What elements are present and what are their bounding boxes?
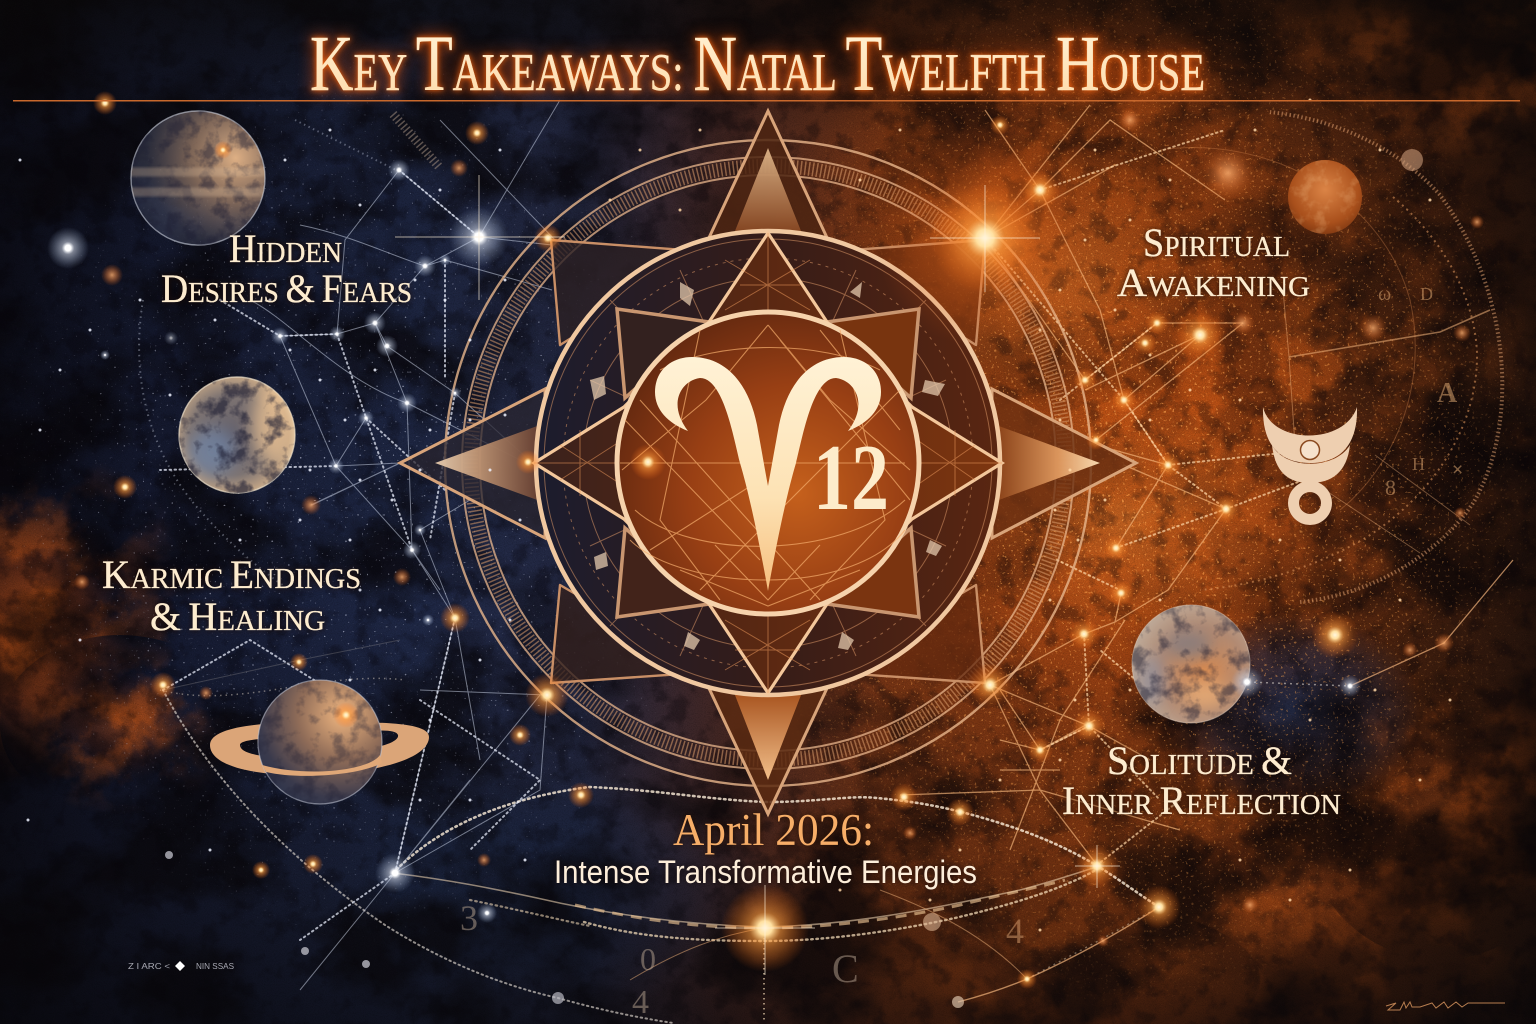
small footer mark left: Z I ARC <	[128, 962, 170, 971]
constellation lines: blue side	[250, 100, 560, 990]
central aries glyph with 12	[655, 357, 889, 591]
label: hidden desires and fears: HIDDEN	[229, 226, 342, 271]
title: KEY TAKEAWAYS: NATAL TWELFTH HOUSE	[310, 21, 1205, 108]
faint zodiac glyphs: 8	[1385, 475, 1396, 500]
scattered small stars	[20, 100, 1450, 930]
star arm fine lines	[534, 233, 1002, 693]
mandala four-point inner star	[534, 233, 1002, 693]
small footer mark left: NIN SSAS	[196, 962, 234, 971]
mandala floating shards	[590, 282, 945, 650]
label: karmic endings and healing	[102, 552, 361, 639]
title rule	[13, 100, 1520, 102]
dotted links: blue side	[160, 170, 540, 940]
outer zodiac chart arcs	[139, 112, 1513, 686]
label: solitude and inner reflection: INNER REFLECTION	[1062, 778, 1341, 823]
planet surface texture	[1288, 160, 1362, 234]
faint zodiac glyphs: ×	[1452, 459, 1463, 481]
faint zodiac glyphs: 4	[1006, 911, 1024, 951]
planet: upper right orange	[1286, 157, 1364, 236]
faint zodiac glyphs: C	[832, 946, 859, 991]
faint zodiac glyphs: D	[1420, 284, 1433, 304]
planet surface texture	[258, 680, 382, 804]
signature bottom right	[1386, 1002, 1505, 1010]
planet: upper left glass sphere	[130, 110, 270, 246]
label: solitude and inner reflection	[1062, 738, 1341, 823]
small footer mark left	[128, 961, 234, 971]
label: spiritual awakening: AWAKENING	[1117, 260, 1310, 305]
constellation lines: orange side	[900, 105, 1243, 865]
mandala inner light triangles	[435, 148, 1100, 780]
mandala outer rings	[445, 140, 1091, 786]
mandala inner disc	[617, 312, 919, 614]
faint zodiac glyphs	[460, 283, 1463, 1021]
callout: april 2026: Intense Transformative Energies	[554, 854, 977, 890]
planet: saturn with ring	[210, 680, 429, 804]
mandala large square points	[551, 240, 985, 683]
callout: april 2026: April 2026:	[673, 805, 874, 855]
icon: uranus-style glyph	[1263, 407, 1357, 525]
label: spiritual awakening	[1117, 220, 1310, 305]
outer bottom right arc	[958, 907, 1159, 1002]
mandala outer star arms	[400, 111, 1136, 814]
label: karmic endings and healing: & HEALING	[150, 594, 325, 639]
house number 12: 12	[813, 426, 889, 530]
planet surface patches	[179, 377, 295, 493]
dotted links: orange side	[985, 130, 1330, 865]
lower arc	[584, 870, 1096, 941]
mandala inner geometric lines	[620, 325, 910, 606]
faint zodiac glyphs: 4	[632, 984, 649, 1021]
label: solitude and inner reflection: SOLITUDE &	[1107, 738, 1292, 783]
planet surface patches	[1132, 605, 1250, 723]
faint zodiac glyphs: H	[1412, 454, 1425, 474]
planet: middle left sphere	[179, 377, 295, 493]
mandala middle ring detail	[544, 239, 992, 687]
outer bottom left arc	[163, 690, 673, 1023]
faint zodiac glyphs: 0	[640, 941, 656, 977]
middle arc	[393, 867, 1096, 927]
faint zodiac glyphs: 3	[460, 898, 478, 938]
icon: aries symbol	[655, 357, 881, 591]
label: spiritual awakening: SPIRITUAL	[1143, 220, 1290, 265]
mandala middle disc	[536, 231, 1000, 695]
label: hidden desires and fears: DESIRES & FEARS	[161, 266, 412, 311]
label: karmic endings and healing: KARMIC ENDINGS	[102, 552, 361, 597]
upper arc	[393, 787, 1159, 907]
zodiac arcs at bottom	[160, 640, 1159, 1023]
dashed band	[575, 880, 1065, 928]
mandala: central sacred geometry	[400, 111, 1136, 814]
planet: lower right sphere	[1132, 605, 1263, 723]
faint zodiac glyphs: A	[1437, 378, 1458, 409]
planet bands	[130, 110, 270, 246]
mandala kite square	[617, 309, 919, 617]
callout: april 2026	[554, 805, 977, 890]
faint zodiac glyphs: ω	[1378, 283, 1391, 305]
label: hidden desires and fears	[161, 226, 412, 311]
